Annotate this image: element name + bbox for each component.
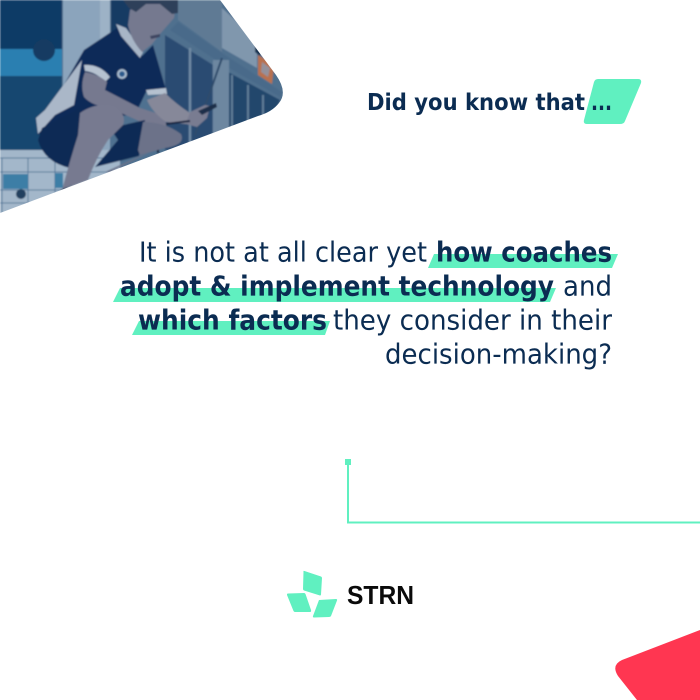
heading: did you know that xyxy=(367,79,641,124)
line 1: It is not at all clear yet xyxy=(139,236,427,268)
ellipsis: ... xyxy=(591,90,612,116)
man: legs xyxy=(62,105,124,190)
line 2 end: and xyxy=(563,270,612,302)
corner shape: red xyxy=(615,630,700,700)
heading text: Did you know that xyxy=(367,90,585,116)
man: head xyxy=(128,2,174,52)
man: forearm and hand xyxy=(147,93,190,124)
man: arm xyxy=(82,72,167,131)
photo: athlete crouching with a stopwatch xyxy=(0,0,300,220)
highlight: ellipsis parallelogram xyxy=(584,79,641,124)
highlight: how coaches xyxy=(428,254,618,268)
logo wordmark: STRN xyxy=(347,580,414,610)
line 4: decision-making? xyxy=(385,338,612,370)
connector line xyxy=(345,459,700,522)
text block: main question xyxy=(113,236,618,370)
highlight: which factors xyxy=(132,321,330,335)
man: shorts xyxy=(38,116,80,168)
icon: logo mark xyxy=(287,571,337,618)
man: jersey xyxy=(37,26,166,135)
highlight: adopt and implement technology xyxy=(113,288,556,302)
logo: STRN xyxy=(287,571,414,618)
background: building right xyxy=(150,0,285,150)
bold: how coaches: how coaches xyxy=(436,236,612,268)
bold: adopt and implement technology: adopt & implement technology xyxy=(120,270,554,302)
bold: which factors: which factors xyxy=(138,304,327,336)
line 3 end: they consider in their xyxy=(333,304,613,336)
